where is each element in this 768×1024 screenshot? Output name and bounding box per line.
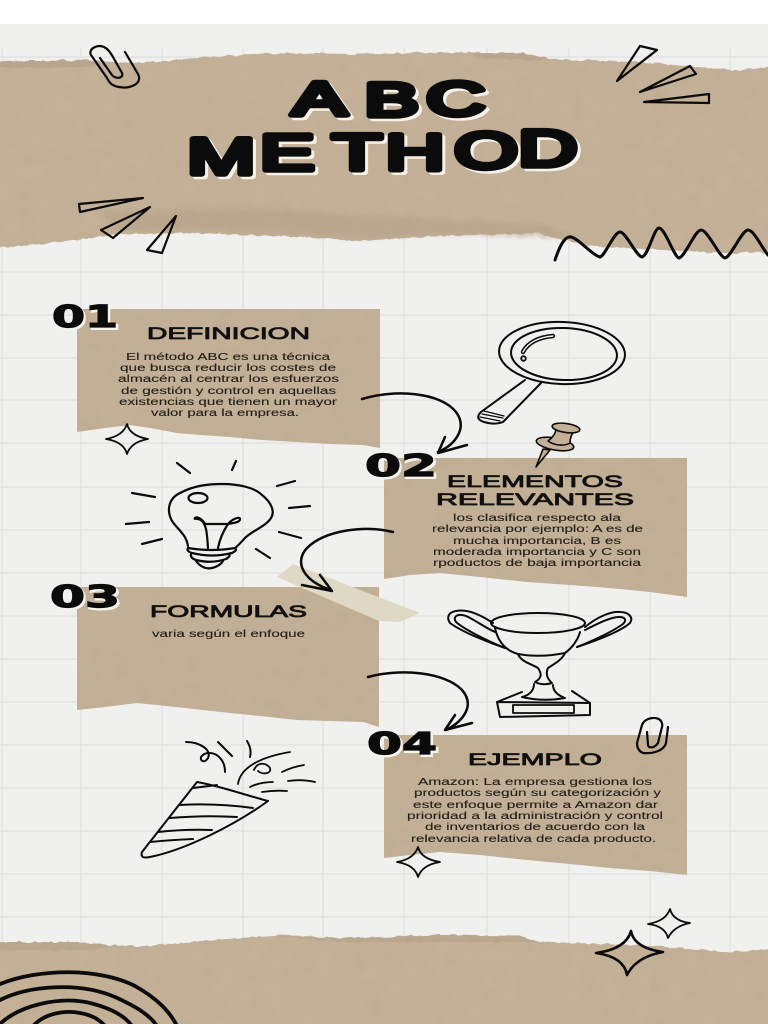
panel: ejemplo — [367, 727, 687, 875]
icon: star on ejemplo — [397, 847, 440, 877]
icon: trophy — [448, 610, 631, 717]
icon: concentric arcs — [0, 972, 177, 1024]
icon: paperclip ejemplo — [637, 718, 668, 753]
text definicion: El método ABC es una técnica — [126, 352, 331, 363]
title: ABC — [292, 73, 485, 127]
title: METHOD — [190, 123, 580, 188]
heading elementos relevantes — [436, 472, 634, 509]
icon: small star — [648, 909, 690, 938]
text definicion: valor para la empresa. — [151, 408, 299, 419]
number 03: 03 — [51, 582, 122, 617]
heading ejemplo: EJEMPLO — [468, 750, 602, 769]
text elementos — [432, 513, 644, 569]
icon: zigzag — [555, 228, 768, 260]
text ejemplo: prioridad a la administración y control — [407, 811, 663, 822]
number 03: 03 — [50, 580, 120, 615]
text ejemplo: de inventarios de acuerdo con la — [425, 822, 646, 833]
number 04: 04 — [368, 729, 439, 764]
number 01: 01 — [52, 300, 118, 335]
heading elementos relevantes: ELEMENTOS — [447, 472, 623, 491]
icon: masking tape — [277, 564, 420, 622]
number 04: 04 — [367, 727, 437, 762]
title: ABC — [295, 76, 488, 129]
title: METHOD — [187, 120, 577, 185]
text elementos: rpoductos de baja importancia — [433, 558, 642, 569]
icon: push pin — [535, 422, 580, 467]
icon: spikes lower left — [79, 198, 176, 253]
title — [187, 73, 580, 188]
icon: magnifying glass — [478, 320, 626, 424]
text definicion: de gestión y control en aquellas — [121, 386, 336, 397]
text elementos: relevancia por ejemplo: A es de — [432, 524, 644, 535]
text ejemplo: relevancia relativa de cada producto. — [411, 834, 656, 845]
number 02 — [365, 449, 439, 486]
number 02: 02 — [365, 449, 437, 484]
text definicion: almacén al centrar los esfuerzos — [118, 374, 339, 385]
text formulas: varia según el enfoque — [152, 629, 306, 640]
icon: spikes top right — [617, 46, 709, 103]
panel: torn title banner — [0, 52, 768, 253]
panel: elementos relevantes — [365, 449, 687, 597]
text ejemplo: este enfoque permite a Amazon dar — [413, 800, 659, 811]
icon: paperclip top — [90, 46, 139, 87]
text definicion: existencias que tienen un mayor — [119, 397, 338, 408]
heading definicion: DEFINICION — [147, 324, 310, 343]
arrow: formulas to ejemplo — [368, 672, 472, 730]
text ejemplo: productos según su categorización y — [414, 788, 661, 799]
text definicion — [118, 352, 339, 419]
number 01: 01 — [53, 302, 120, 337]
arrow: elementos to formulas — [301, 529, 393, 591]
icon: party popper — [142, 741, 315, 857]
panel: bottom torn banner — [0, 935, 768, 1024]
icon: large star — [596, 931, 663, 975]
text ejemplo — [407, 777, 663, 845]
panel: formulas — [50, 580, 379, 727]
number 02: 02 — [366, 451, 439, 486]
text elementos: moderada importancia y C son — [433, 547, 641, 558]
number 03 — [50, 580, 122, 617]
icon: star under definicion — [106, 424, 148, 454]
panel: definicion — [52, 300, 380, 448]
text ejemplo: Amazon: La empresa gestiona los — [418, 777, 652, 788]
icon: bulb — [126, 461, 310, 568]
text elementos: los clasifica respecto ala — [453, 513, 622, 524]
text definicion: que busca reducir los costes de — [120, 363, 337, 374]
arrow: definicion to elementos — [362, 393, 467, 453]
text elementos: mucha importancia, B es — [453, 536, 621, 547]
heading formulas: FORMULAS — [150, 602, 307, 621]
number 01 — [52, 300, 120, 337]
number 04 — [367, 727, 439, 764]
heading elementos relevantes: RELEVANTES — [436, 490, 634, 509]
